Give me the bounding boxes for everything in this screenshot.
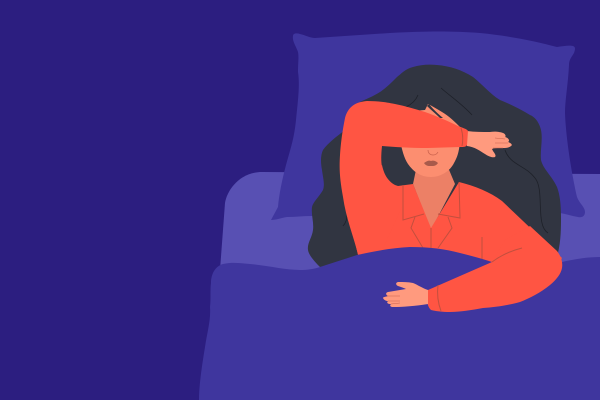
nose bbox=[428, 150, 438, 155]
cuff seam bbox=[438, 285, 441, 311]
elbow crease bbox=[492, 248, 522, 262]
mouth bbox=[424, 161, 438, 166]
neck bbox=[413, 165, 455, 230]
torso bbox=[345, 165, 562, 290]
lower hand bbox=[383, 282, 428, 307]
lower sleeve bbox=[427, 226, 562, 312]
lower arm over blanket bbox=[383, 226, 562, 312]
woman bbox=[340, 101, 562, 290]
raised sleeve bbox=[340, 101, 468, 255]
hair strands bbox=[343, 88, 548, 233]
finger lines bbox=[493, 138, 508, 148]
pajama collar and seams bbox=[403, 128, 482, 262]
hair bbox=[308, 65, 561, 267]
lower hand finger lines bbox=[387, 296, 400, 304]
facial features bbox=[424, 150, 438, 166]
pillow bbox=[271, 32, 585, 220]
blanket bbox=[199, 247, 600, 400]
upper hand bbox=[467, 131, 512, 157]
face bbox=[400, 104, 461, 177]
fringe strand bbox=[427, 104, 443, 118]
bed mattress and headboard bbox=[220, 172, 600, 300]
